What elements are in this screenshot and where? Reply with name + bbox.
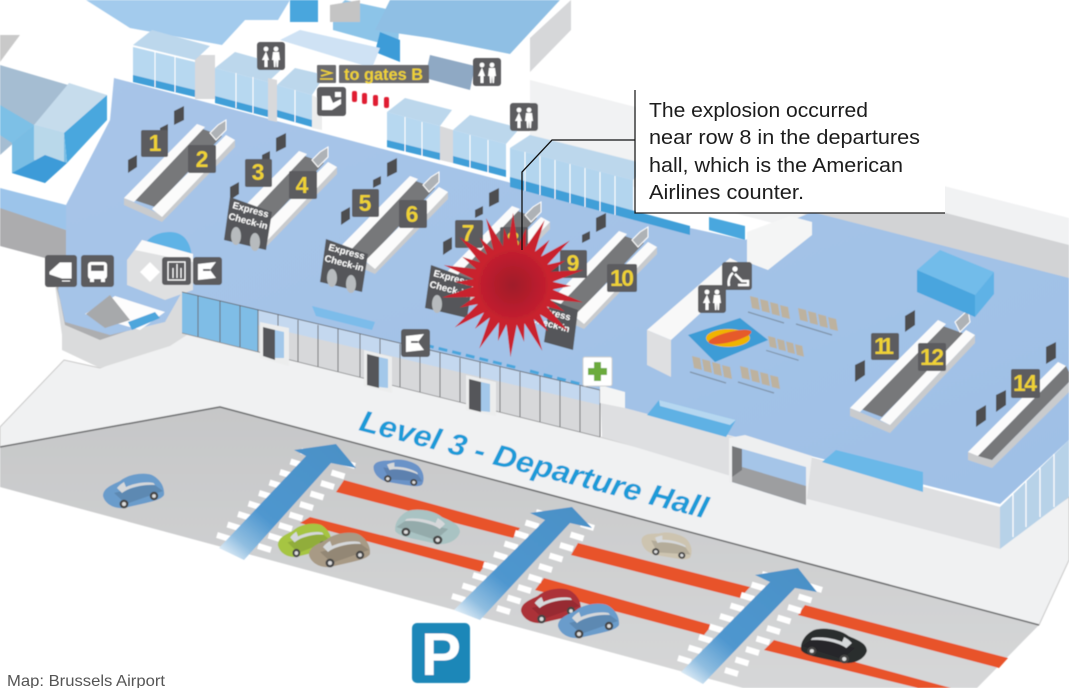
service icon at entrance xyxy=(401,329,430,357)
callout leader line xyxy=(522,140,635,250)
counter island 3-4 xyxy=(226,133,337,249)
hall label: Level 3 - Departure Hall xyxy=(356,405,712,525)
express check-in sign at row 5: Express xyxy=(327,242,366,262)
right glass box xyxy=(917,250,994,317)
callout box: The explosion occurred xyxy=(649,99,868,122)
car: blue far left xyxy=(103,474,164,508)
express check-in sign at row 7: Check-in xyxy=(428,279,470,300)
express check-in sign at row 3 xyxy=(224,197,272,251)
counter number badges: 1 xyxy=(149,130,162,156)
explosion burst xyxy=(441,213,585,357)
crosswalk stripes xyxy=(217,451,822,674)
waiting area wall block xyxy=(647,258,750,377)
baby changing icon xyxy=(722,262,752,290)
counter island 7-8 xyxy=(439,188,550,304)
red barrier posts xyxy=(352,91,389,108)
restroom icon 1 xyxy=(257,42,285,70)
parking lane markings xyxy=(300,480,1008,688)
restroom icon 3 xyxy=(510,103,538,131)
parking sign xyxy=(412,621,470,688)
waiting seats xyxy=(690,296,838,393)
express check-in sign at row 7 xyxy=(425,265,473,318)
restroom icon 2 xyxy=(473,58,501,86)
front glass facade xyxy=(182,292,600,437)
car: pale green-grey xyxy=(395,510,460,544)
counter island 1-2 xyxy=(124,106,235,222)
car: beige xyxy=(638,523,696,568)
counter number badges: 11 xyxy=(874,333,894,359)
express check-in sign at row 5: Check-in xyxy=(323,253,365,274)
parking sign: P xyxy=(421,621,461,688)
counter number badges: 12 xyxy=(920,344,944,370)
car: blue near entrance xyxy=(370,450,428,495)
car: red xyxy=(521,589,581,623)
departure hall floor xyxy=(58,78,1069,504)
lift icon xyxy=(162,257,191,285)
pier block behind waiting area xyxy=(747,216,812,270)
counter number badges: 8 xyxy=(507,227,520,253)
counter number badges: 9 xyxy=(567,250,579,276)
elevator block xyxy=(127,232,193,300)
forecourt pavement xyxy=(0,333,1069,625)
callout box xyxy=(635,88,945,213)
car: tan xyxy=(309,533,370,567)
callout box: near row 8 in the departures xyxy=(649,126,920,149)
door 3 xyxy=(466,375,496,416)
counter number badges: 5 xyxy=(359,190,372,216)
upper concourse white and blue structures xyxy=(0,0,571,90)
callout box: hall, which is the American xyxy=(649,154,903,177)
counter number badges xyxy=(141,130,1040,398)
car: blue lower xyxy=(558,604,619,638)
gates direction icon xyxy=(317,65,336,83)
counter number badges: 7 xyxy=(462,220,474,246)
right front wall xyxy=(600,385,1069,549)
counter number badges: 14 xyxy=(1013,370,1037,396)
block of glass shops at left xyxy=(0,83,107,183)
counter number badges: 10 xyxy=(610,265,634,291)
bus icon xyxy=(81,255,114,287)
callout box: Airlines counter. xyxy=(649,181,804,204)
express check-in sign at row 9 xyxy=(529,300,578,350)
arrow 3 xyxy=(681,568,817,684)
first aid icon xyxy=(583,357,612,386)
train icon xyxy=(45,255,77,287)
escalator xyxy=(85,295,165,330)
express check-in sign at row 7: Express xyxy=(432,268,471,288)
counter island 11-12 xyxy=(850,310,975,433)
car: lime green xyxy=(278,524,332,557)
left outer wall of hall xyxy=(0,65,190,368)
restroom icon 4 xyxy=(698,285,726,313)
counter island 9-10 xyxy=(546,213,657,329)
door 1 xyxy=(260,322,289,366)
counter island 5-6 xyxy=(337,158,448,274)
arrow 2 xyxy=(454,507,592,620)
express check-in sign at row 3: Express xyxy=(231,200,270,220)
express check-in sign at row 9: Express xyxy=(533,303,572,323)
service icon xyxy=(193,257,222,285)
express check-in sign at row 5 xyxy=(320,239,368,293)
express check-in sign at row 9: Check-in xyxy=(529,314,571,335)
to gates B tag: to gates B xyxy=(344,66,423,84)
car: black xyxy=(801,629,867,663)
counter number badges: 2 xyxy=(196,146,208,172)
counter number badges: 3 xyxy=(252,159,264,185)
glass shops along back wall xyxy=(133,30,745,240)
arrow 1 xyxy=(219,444,356,560)
counter number badges: 6 xyxy=(406,201,418,227)
counter number badges: 4 xyxy=(296,172,309,198)
road kerb line xyxy=(0,407,1039,625)
door 2 xyxy=(364,350,392,393)
counter island 14 xyxy=(968,342,1069,468)
express check-in sign at row 3: Check-in xyxy=(227,211,269,232)
check-in desk icon xyxy=(317,87,346,116)
right side back wall xyxy=(530,80,1069,300)
waiting area carpet xyxy=(688,318,768,362)
road surface xyxy=(0,407,1039,688)
